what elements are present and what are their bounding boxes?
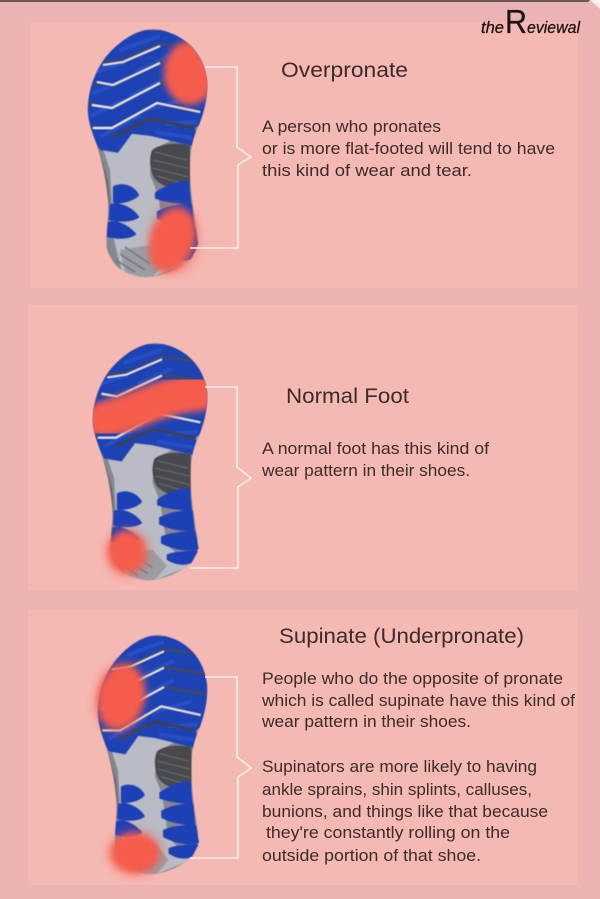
body text: risks: outside portion of that shoe. (262, 846, 481, 865)
top edge bar (0, 0, 590, 2)
heading: Normal Foot (286, 384, 409, 408)
panel: overpronate (31, 20, 578, 288)
bracket (190, 387, 251, 568)
body text: risks: Supinators are more likely to having (262, 757, 537, 776)
icon: supinate shoe sole with wear marks (89, 626, 214, 882)
body text: A normal foot has this kind of (262, 439, 489, 458)
body text: or is more flat-footed will tend to have (262, 139, 555, 158)
body text: risks: bunions, and things like that because (262, 802, 548, 821)
logo: R (505, 3, 527, 40)
body text: wear pattern in their shoes. (261, 461, 470, 480)
icon: overpronate shoe sole with wear marks (87, 28, 208, 279)
body text (262, 117, 555, 180)
bracket (190, 67, 251, 248)
bracket (190, 677, 251, 858)
body text: definition: wear pattern in their shoes. (261, 712, 471, 731)
logo (481, 3, 581, 40)
panel background (28, 610, 578, 885)
body text: definition: People who do the opposite of pronate (262, 669, 563, 688)
body text: risks: they're constantly rolling on the (266, 823, 510, 842)
logo: eviewal (527, 18, 581, 37)
body text: definition (261, 669, 575, 731)
heading: Supinate (Underpronate) (279, 624, 524, 648)
icon: normal foot shoe sole with wear marks (92, 342, 208, 582)
body text: definition: which is called supinate have this kind of (261, 691, 575, 710)
body text: risks: ankle sprains, shin splints, calluses, (262, 780, 532, 799)
body text: this kind of wear and tear. (262, 161, 472, 180)
panel background (31, 22, 578, 288)
body text: risks (262, 757, 548, 865)
body text: A person who pronates (262, 117, 441, 136)
panel: normal foot (28, 305, 578, 590)
top right corner (590, 0, 600, 9)
panel background (28, 305, 578, 590)
logo: the (481, 18, 504, 37)
panel: supinate (28, 610, 578, 885)
body text (261, 439, 489, 480)
heading: Overpronate (281, 58, 408, 82)
